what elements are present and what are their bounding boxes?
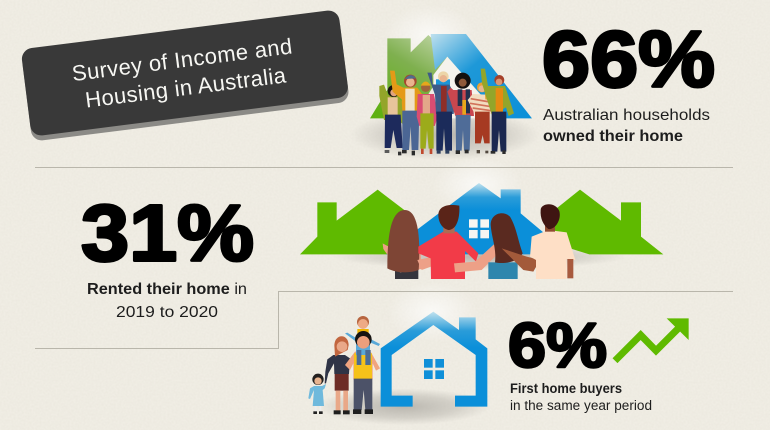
person 7: [481, 69, 514, 154]
icon: green house: [370, 35, 452, 118]
person 3: [417, 81, 438, 154]
person: man in red shirt: [418, 205, 507, 279]
divider lines: [35, 168, 733, 348]
caption: first home buyers: First home buyers: [510, 381, 622, 396]
title: Housing in Australia: [84, 62, 288, 113]
icon: window: [424, 359, 444, 379]
group of seven people: [379, 69, 514, 155]
caption: rented their home: [87, 281, 247, 321]
person 6: [468, 82, 493, 153]
stat: 6%: 6%: [508, 311, 607, 381]
person: man in cream shirt: [502, 204, 575, 279]
title panel: [21, 9, 350, 142]
person: woman in dark top: [383, 210, 453, 279]
caption: owned their home: [543, 107, 710, 145]
person: woman in teal top: [488, 213, 523, 279]
title: Survey of Income and: [70, 33, 294, 86]
caption: rented their home: 2019 to 2020: [116, 304, 218, 321]
caption: first home buyers: [510, 381, 652, 413]
icon: right green house: [548, 190, 663, 254]
stat: 66%: 66%: [542, 14, 715, 104]
person: father with child on shoulders: [345, 316, 380, 414]
caption: rented their home: Rented their home in: [87, 281, 247, 298]
illustration: community and house: [350, 34, 540, 160]
illustration: renters facing houses: [300, 183, 663, 279]
illustration: family and house: [308, 312, 490, 425]
person: mother: [325, 336, 350, 414]
person: small girl: [308, 374, 326, 414]
icon: blue house: [431, 34, 532, 118]
icon: window: [469, 219, 489, 238]
caption: owned their home: Australian households: [543, 107, 710, 124]
person 5: [447, 73, 474, 154]
person 4: [427, 71, 455, 154]
stat: 31%: 31%: [81, 188, 254, 278]
icon: rising green arrow: [615, 318, 689, 361]
icon: blue house: [386, 183, 543, 254]
person 1: [379, 85, 403, 155]
person 2: [390, 71, 423, 155]
caption: owned their home: owned their home: [543, 128, 683, 145]
icon: outlined blue house: [381, 312, 487, 407]
caption: first home buyers: in the same year period: [510, 398, 652, 413]
icon: left green house: [300, 190, 412, 254]
